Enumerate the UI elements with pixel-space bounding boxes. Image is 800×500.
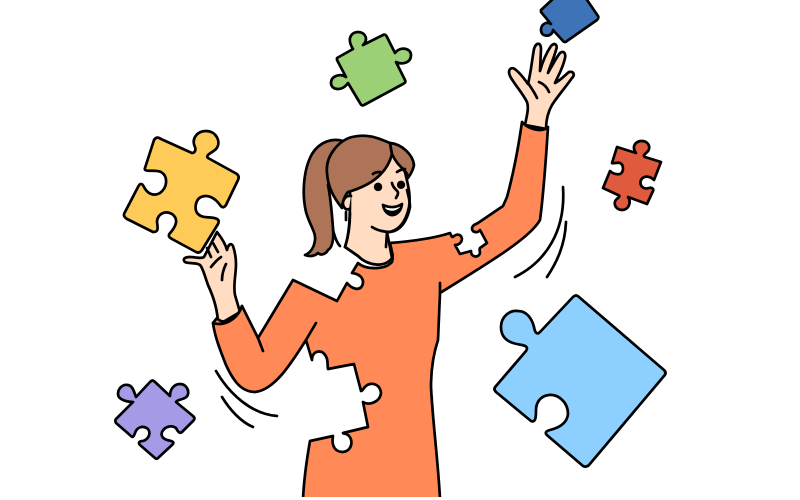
puzzle piece: green [331, 32, 411, 105]
woman figure [124, 44, 574, 499]
orange dress with puzzle cut-outs [213, 122, 548, 499]
ponytail strand [333, 230, 340, 246]
hair [327, 136, 392, 208]
ponytail [304, 140, 343, 256]
left hand finger lines [207, 243, 226, 280]
right hand [509, 44, 574, 129]
puzzle piece: red [603, 141, 661, 210]
puzzle piece: dark blue [541, 0, 598, 42]
motion lines: lower left [216, 371, 277, 427]
left hand [184, 232, 240, 325]
ear and facial features [343, 169, 410, 256]
dress inner fold lines [213, 283, 440, 351]
puzzle piece: purple [115, 380, 194, 459]
white strip below dress hem [295, 497, 450, 500]
right hand palm lines [528, 82, 549, 98]
puzzle piece: light blue [494, 296, 666, 467]
neck and face [345, 153, 410, 265]
motion lines: right [515, 187, 566, 277]
puzzle piece: yellow [124, 131, 239, 253]
hair: right lock [390, 143, 414, 178]
